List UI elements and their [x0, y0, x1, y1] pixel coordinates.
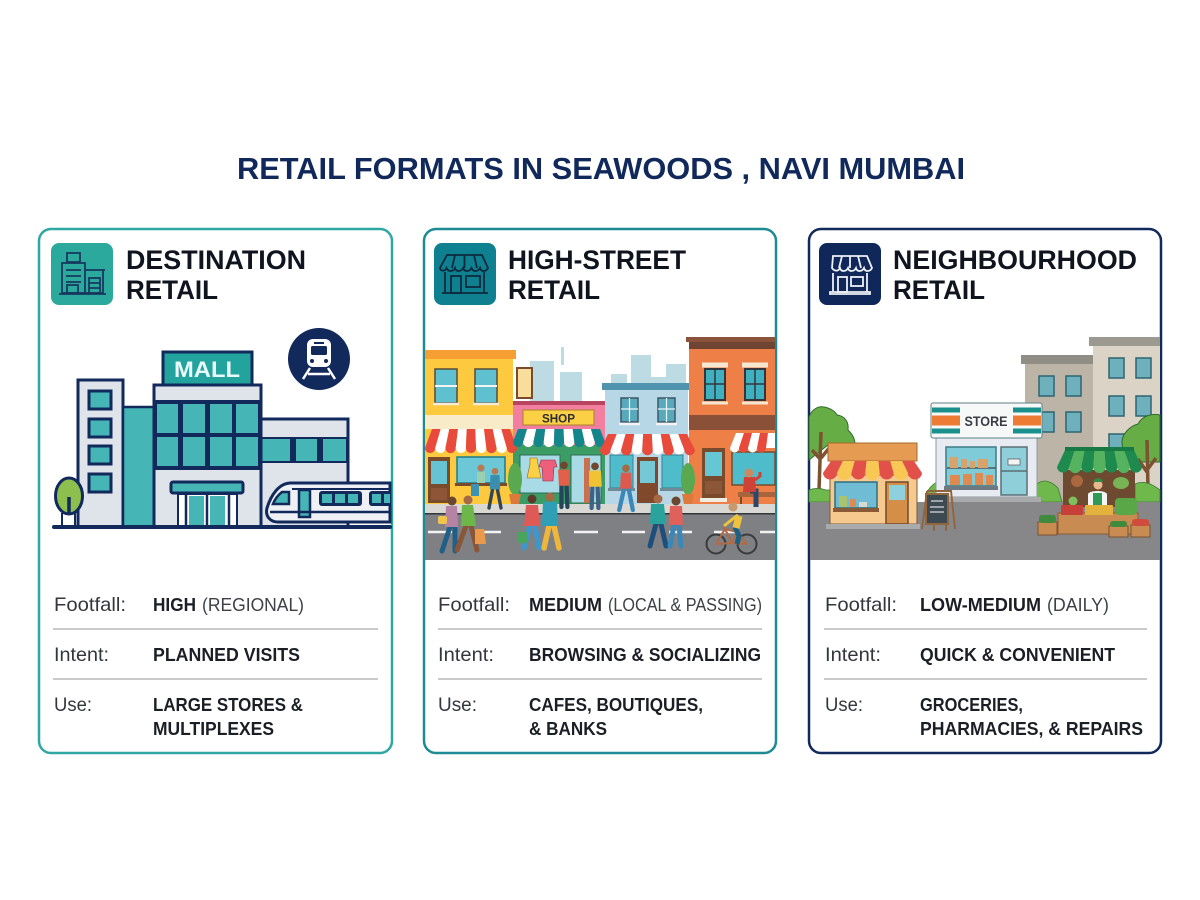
awning: yellow shop: [425, 429, 517, 453]
row: footfall: (REGIONAL): [202, 595, 304, 615]
heading: RETAIL: [893, 275, 985, 305]
people on pavement: [489, 462, 633, 510]
row: footfall: LOW-MEDIUM: [920, 595, 1041, 615]
icon: train badge: [288, 328, 350, 390]
market stall: [1038, 470, 1150, 537]
title: RETAIL FORMATS IN SEAWOODS , NAVI MUMBAI: [237, 151, 965, 186]
heading: NEIGHBOURHOOD: [893, 245, 1137, 275]
row: intent: [438, 644, 761, 666]
bench and seated man: [738, 468, 775, 507]
heading: DESTINATION: [126, 245, 306, 275]
row: use: GROCERIES,: [920, 695, 1023, 715]
awning: market stall: [1057, 447, 1142, 473]
row: footfall: HIGH: [153, 595, 196, 615]
right wing: [260, 419, 348, 527]
illustration: street scene: [425, 337, 775, 560]
row: use: Use:: [825, 694, 863, 716]
heading: [508, 245, 686, 305]
row: intent: QUICK & CONVENIENT: [920, 645, 1115, 665]
row: footfall: [825, 594, 1109, 616]
row: footfall: (DAILY): [1047, 595, 1109, 615]
chalkboard sign: [922, 491, 955, 531]
convenience store: STORE: [964, 413, 1008, 429]
row: use: [438, 694, 703, 739]
icon: corner store tile: [819, 243, 881, 305]
row: use: PHARMACIES, & REPAIRS: [920, 719, 1143, 739]
row: intent: Intent:: [54, 644, 109, 666]
row: use: [825, 694, 1143, 739]
panel: neighbourhood retail: [809, 229, 1161, 753]
apartment blocks: [1021, 337, 1160, 503]
row: intent: Intent:: [825, 644, 881, 666]
icon: mall building tile: [51, 243, 113, 305]
mall sign: [163, 352, 252, 385]
row: footfall: Footfall:: [438, 594, 510, 616]
shop building: SHOP: [542, 412, 575, 426]
heading: RETAIL: [508, 275, 600, 305]
main mall block: [154, 385, 261, 527]
row: intent: BROWSING & SOCIALIZING: [529, 645, 761, 665]
row: use: LARGE STORES &: [153, 695, 303, 715]
row: intent: [54, 644, 300, 666]
heading: [126, 245, 306, 305]
trees: [809, 407, 1160, 490]
train: [267, 483, 391, 522]
yellow building: [425, 350, 516, 504]
illustration: mall and train: [54, 328, 391, 527]
heading: [893, 245, 1137, 305]
bushes and ground: [809, 480, 1160, 560]
road and pavement: [425, 503, 775, 560]
brick building: [686, 337, 775, 504]
cyclist: [706, 502, 756, 554]
awning: brick shop: [730, 433, 775, 452]
mall sign: MALL: [174, 357, 240, 382]
illustration: neighbourhood scene: [809, 337, 1160, 560]
row: use: Use:: [438, 694, 477, 716]
panel: high-street retail: [424, 229, 776, 753]
row: footfall: MEDIUM: [529, 595, 602, 615]
row: intent: PLANNED VISITS: [153, 645, 300, 665]
row: use: Use:: [54, 694, 92, 716]
panel: destination retail: [39, 229, 392, 753]
row: footfall: [438, 594, 762, 616]
heading: RETAIL: [126, 275, 218, 305]
tree: [56, 478, 82, 527]
planters: [508, 463, 695, 504]
row: intent: [825, 644, 1115, 666]
people walking: [438, 492, 683, 551]
row: use: & BANKS: [529, 719, 607, 739]
convenience store: [931, 403, 1042, 502]
row: use: [54, 694, 303, 739]
blue building: [602, 383, 689, 504]
row: intent: Intent:: [438, 644, 494, 666]
awning: corner shop: [823, 461, 922, 480]
corner shop: [826, 443, 920, 529]
shop building: [513, 368, 605, 504]
skyline: [530, 347, 686, 406]
awning: blue shop: [600, 434, 695, 455]
row: footfall: (LOCAL & PASSING): [608, 595, 762, 615]
heading: HIGH-STREET: [508, 245, 686, 275]
awning: shop: [513, 429, 605, 447]
row: footfall: Footfall:: [825, 594, 897, 616]
row: use: MULTIPLEXES: [153, 719, 274, 739]
icon: storefront tile: [434, 243, 496, 305]
row: footfall: [54, 594, 304, 616]
row: footfall: Footfall:: [54, 594, 126, 616]
left tower: [78, 380, 123, 527]
row: use: CAFES, BOUTIQUES,: [529, 695, 703, 715]
